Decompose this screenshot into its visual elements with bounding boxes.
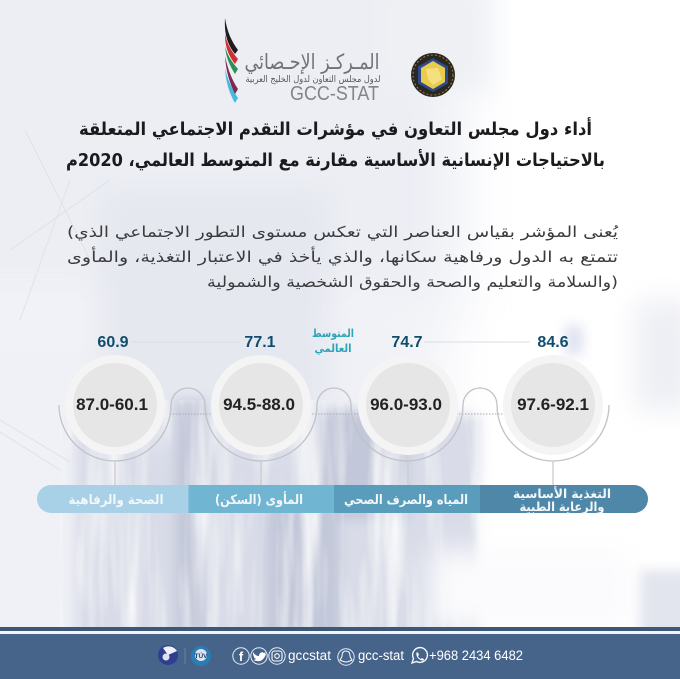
circle: health and wellbeing: 60.9: [97, 334, 129, 351]
circle: shelter: 77.1: [244, 334, 276, 351]
circle: health and wellbeing: 87.0-60.1: [76, 395, 148, 414]
icon: twitter: [251, 648, 267, 664]
connector wave: [59, 388, 609, 461]
label: shelter: المأوى (السكن): [215, 491, 303, 508]
circle: shelter: 94.5-88.0: [223, 395, 295, 414]
icon: certification badge 2: TÜV: [194, 651, 208, 660]
icon: certification badge 2: [191, 646, 211, 666]
label: health and wellbeing: الصحة والرفاهية: [68, 493, 164, 508]
world average label: المتوسط: [312, 327, 354, 340]
icon: snapchat: [338, 649, 354, 665]
logo arabic name: المـركـز الإحـصائي: [244, 50, 380, 74]
label: water and sanitation: المياه والصرف الصحي: [344, 493, 468, 508]
icon: GCC emblem: [411, 53, 455, 97]
world average label: [312, 327, 354, 355]
label: nutrition and medical care: والرعاية الطبية: [520, 499, 604, 514]
circle: water and sanitation: 74.7: [391, 334, 423, 351]
world average label: العالمي: [314, 342, 352, 355]
handle: gccstat: gccstat: [288, 648, 331, 663]
circle: water and sanitation: [358, 334, 458, 455]
circle: basic nutrition and medical care: 97.6-92.1: [517, 395, 589, 414]
handle: gcc-stat: gcc-stat: [358, 648, 404, 663]
icon: whatsapp: [412, 648, 427, 663]
description text: تتمتع به الدول ورفاهية سكانها، والذي يأخذ في الاعتبار التغذية، والمأوى: [67, 246, 618, 267]
icon: colored ribbon: [225, 18, 238, 103]
circle: basic nutrition and medical care: [503, 334, 603, 455]
circle: water and sanitation: 96.0-93.0: [370, 395, 442, 414]
label: nutrition and medical care: [513, 486, 611, 514]
icon: facebook: f: [239, 649, 244, 664]
icon: facebook: [233, 648, 249, 664]
description text: [67, 223, 618, 291]
phone number: +968 2434 6482: [429, 648, 523, 663]
description text: يُعنى المؤشر بقياس العناصر التي تعكس مستوى التطور الاجتماعي الذي): [67, 223, 618, 242]
logo arabic subtitle: لدول مجلس التعاون لدول الخليج العربية: [246, 75, 380, 85]
title: أداء دول مجلس التعاون في مؤشرات التقدم الاجتماعي المتعلقة: [79, 117, 592, 140]
icon: certification badge 1: [158, 645, 178, 665]
footer: [0, 627, 680, 679]
title: بالاحتياجات الإنسانية الأساسية مقارنة مع المتوسط العالمي، 2020م: [66, 149, 605, 171]
label: nutrition and medical care: التغذية الأساسية: [513, 486, 611, 501]
category bar: [37, 485, 648, 514]
stems: [115, 461, 553, 485]
title: [66, 117, 605, 171]
description text: (والسلامة والتعليم والصحة والحقوق الشخصية والشمولية: [207, 273, 618, 291]
logo latin name: GCC-STAT: [290, 83, 379, 105]
icon: instagram: [269, 648, 285, 664]
circle: basic nutrition and medical care: 84.6: [537, 334, 569, 351]
circle: shelter: [211, 334, 311, 455]
chart: indicator circles: [59, 327, 609, 485]
circle: health and wellbeing: [65, 334, 165, 455]
logo: GCC-STAT: [225, 18, 380, 105]
